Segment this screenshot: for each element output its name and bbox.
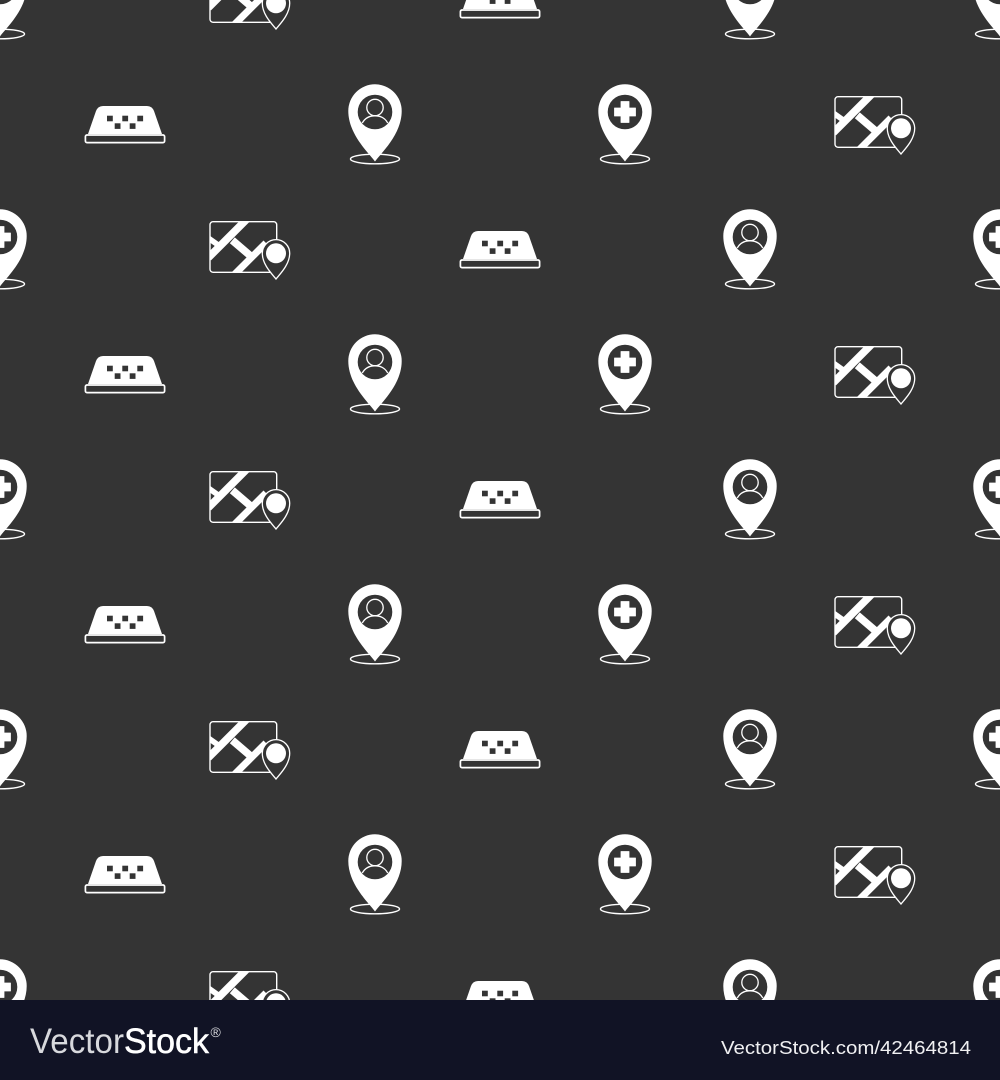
icon: person location pin bottom edge: [723, 959, 777, 1039]
icon: medical location pin row 2 left edge: [0, 209, 27, 289]
icon: city map with pin row 5: [833, 594, 915, 654]
icon: medical location pin row 3: [598, 334, 652, 414]
icon: medical location pin row 4 left edge: [0, 459, 27, 539]
icon: taxi roof sign row 5: [85, 606, 165, 643]
icon: person location pin row 1: [348, 84, 402, 164]
icon: city map with pin bottom edge: [208, 969, 290, 1029]
icon: person location pin row 3: [348, 334, 402, 414]
icon: medical location pin row 2 right edge: [973, 209, 1000, 289]
icon: medical location pin row 7: [598, 834, 652, 914]
icon: city map with pin row 6: [208, 719, 290, 779]
footer logo: VectorStock: VectorStock: [30, 1022, 209, 1061]
icon: city map with pin row 3: [833, 344, 915, 404]
footer bar: [0, 1000, 1000, 1080]
icon: taxi roof sign top edge: [460, 0, 540, 18]
icon: person location pin row 7: [348, 834, 402, 914]
icon: taxi roof sign bottom edge: [460, 981, 540, 1018]
icon: medical location pin row 6 left edge: [0, 709, 27, 789]
footer logo: registered mark: ®: [210, 1024, 222, 1040]
icon: person location pin row 6: [723, 709, 777, 789]
icon: city map with pin row 4: [208, 469, 290, 529]
icon: person location pin row 5: [348, 584, 402, 664]
icon: medical location pin row 6 right edge: [973, 709, 1000, 789]
icon: person location pin row 4: [723, 459, 777, 539]
icon: city map with pin row 7: [833, 844, 915, 904]
icon: taxi roof sign row 2: [460, 231, 540, 268]
icon: medical location pin row 1: [598, 84, 652, 164]
icon: taxi roof sign row 1: [85, 106, 165, 143]
icon: taxi roof sign row 4: [460, 481, 540, 518]
icon: person location pin top edge: [723, 0, 777, 39]
icon: medical location pin bottom left edge: [0, 959, 27, 1039]
icon: medical location pin row 4 right edge: [973, 459, 1000, 539]
icon: medical location pin bottom right edge: [973, 959, 1000, 1039]
icon: taxi roof sign row 3: [85, 356, 165, 393]
icon: city map with pin row 1: [833, 94, 915, 154]
icon: city map with pin top edge: [208, 0, 290, 29]
icon: medical location pin top right edge: [973, 0, 1000, 39]
icon: medical location pin row 5: [598, 584, 652, 664]
footer image id: VectorStock.com/42464814: [721, 1038, 971, 1058]
icon: taxi roof sign row 7: [85, 856, 165, 893]
icon: medical location pin top left edge: [0, 0, 27, 39]
icon: person location pin row 2: [723, 209, 777, 289]
icon: city map with pin row 2: [208, 219, 290, 279]
icon: taxi roof sign row 6: [460, 731, 540, 768]
